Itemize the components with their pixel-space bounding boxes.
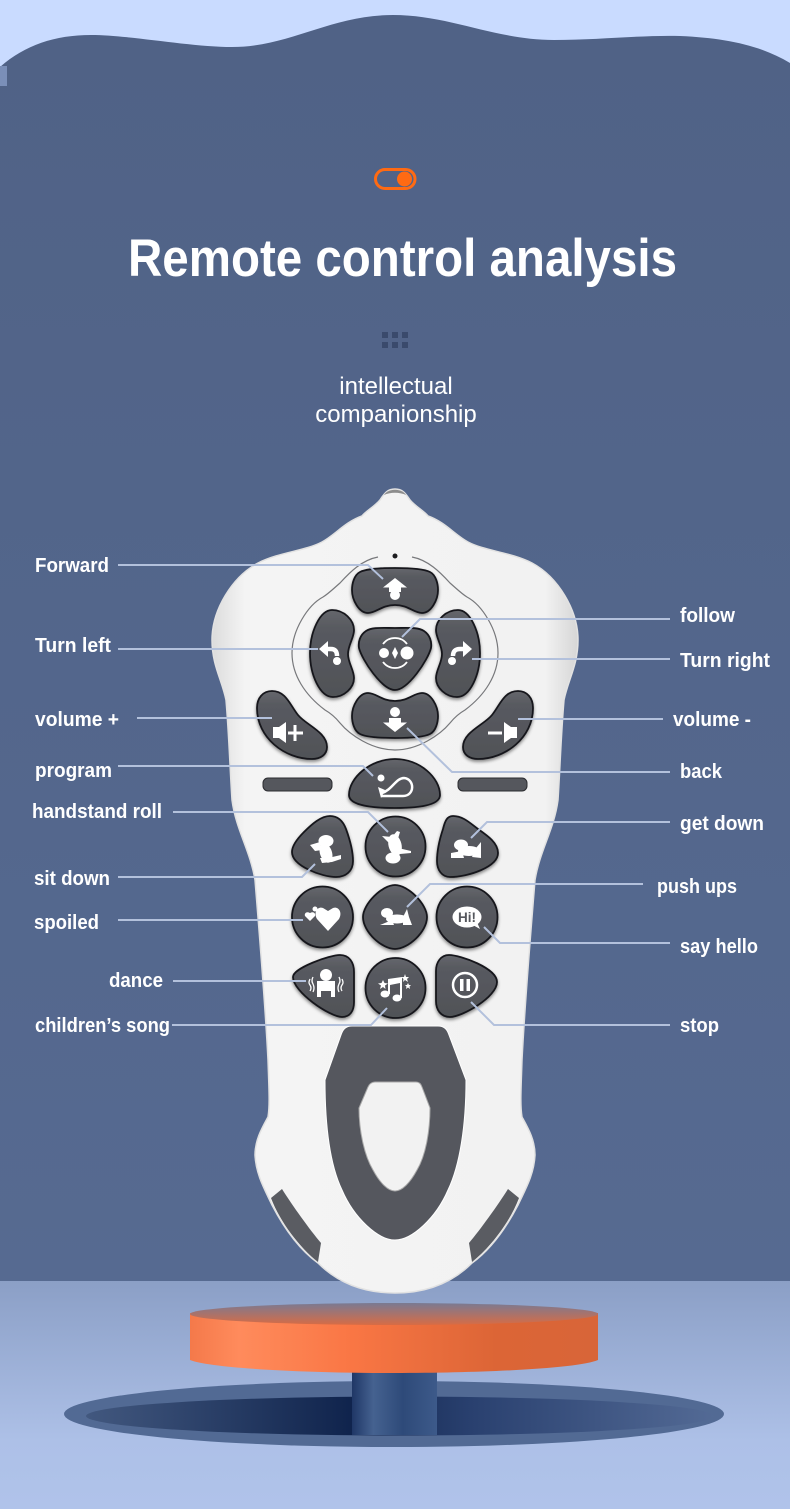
labels right: follow xyxy=(680,605,735,627)
labels left: children’s song xyxy=(35,1015,170,1037)
button: get down xyxy=(437,816,498,877)
labels left: volume + xyxy=(35,709,119,731)
labels right: back xyxy=(680,761,723,783)
title: Remote control analysis xyxy=(128,229,677,288)
pedestal base hollow xyxy=(86,1396,714,1436)
button: back xyxy=(352,693,438,738)
subtitle: companionship xyxy=(315,401,477,428)
button: say hello: Hi! xyxy=(458,910,476,925)
d-pad ring xyxy=(292,557,498,750)
labels right: push ups xyxy=(657,876,737,898)
floor xyxy=(0,1281,790,1509)
labels right xyxy=(657,605,770,1037)
slot left xyxy=(263,778,332,791)
labels left: program xyxy=(35,760,112,782)
labels left: spoiled xyxy=(34,912,99,934)
button: turn right xyxy=(436,610,480,697)
button: volume up xyxy=(257,691,327,759)
button: follow xyxy=(359,628,431,690)
labels left: Forward xyxy=(35,555,109,577)
side grip right xyxy=(469,1189,519,1262)
pedestal base ring xyxy=(64,1381,724,1447)
labels right: volume - xyxy=(673,709,751,731)
button: program xyxy=(349,759,440,808)
orange disc top xyxy=(190,1303,598,1325)
button: turn left xyxy=(310,610,354,697)
labels left xyxy=(32,555,170,1037)
grip hole xyxy=(359,1082,430,1191)
indicator dot xyxy=(392,554,398,558)
labels right: say hello xyxy=(680,936,758,958)
pedestal xyxy=(64,1303,724,1447)
orange disc side xyxy=(190,1313,598,1373)
dot grid icon xyxy=(382,332,408,348)
grip panel xyxy=(325,1026,466,1240)
slot right xyxy=(458,778,527,791)
remote body xyxy=(212,489,578,1293)
subtitle: intellectual xyxy=(339,373,453,400)
button: stop xyxy=(436,955,497,1017)
leader lines xyxy=(118,565,670,1025)
remote control xyxy=(212,489,578,1293)
toggle icon xyxy=(376,170,415,188)
side grip left xyxy=(271,1189,321,1262)
sensor tip xyxy=(384,490,406,495)
labels right: stop xyxy=(680,1015,719,1037)
button: children's song xyxy=(366,958,426,1018)
wall edge strip xyxy=(0,66,7,86)
labels right: Turn right xyxy=(680,650,770,672)
labels left: Turn left xyxy=(35,635,111,657)
button: dance xyxy=(293,955,354,1017)
labels right: get down xyxy=(680,813,764,835)
button: volume down xyxy=(463,691,533,759)
labels left: sit down xyxy=(34,868,110,890)
labels left: dance xyxy=(109,970,163,992)
button: say hello xyxy=(436,886,498,948)
button: push ups xyxy=(363,885,427,949)
pedestal stem xyxy=(352,1365,437,1435)
button: forward xyxy=(352,568,438,613)
labels left: handstand roll xyxy=(32,801,162,823)
button: handstand roll xyxy=(366,816,426,876)
button: sit down xyxy=(292,816,353,877)
button: spoiled xyxy=(292,886,353,948)
